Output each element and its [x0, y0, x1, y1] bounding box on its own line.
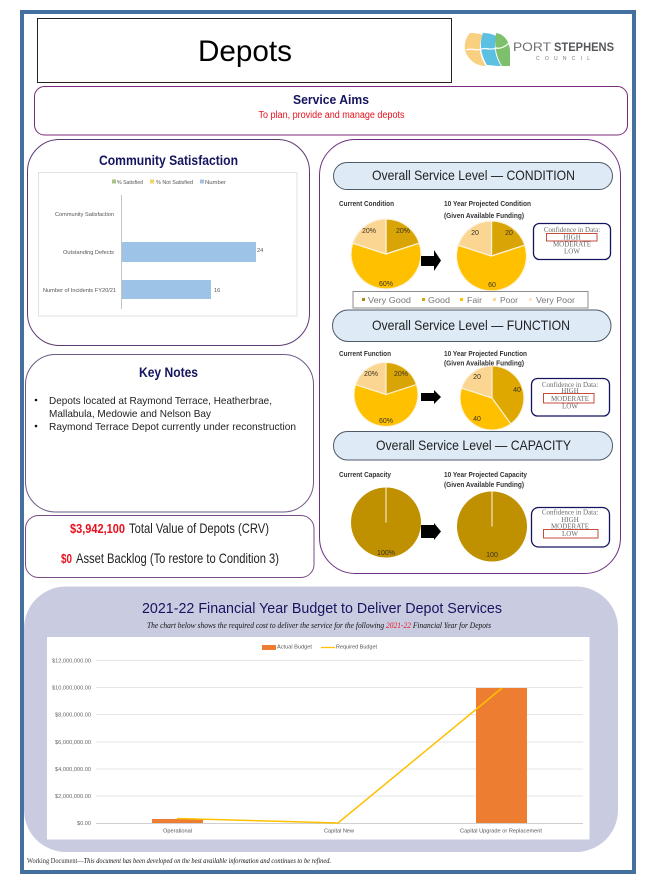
panel: service aims: To plan, provide and manage depots — [258, 110, 404, 121]
pie chart: current function: 20% — [394, 371, 408, 378]
title box: Depots — [198, 35, 292, 68]
pie chart: projected capacity: 100 — [486, 552, 498, 559]
panel: overall service levels — [320, 140, 620, 574]
heading: overall service level function: Overall Service Level — FUNCTION — [372, 317, 570, 333]
callout: confidence in data high: HIGH — [563, 234, 581, 242]
text block: key notes list: Depots located at Raymond Terrace, Heatherbrae, — [49, 395, 272, 407]
panel: service aims — [34, 86, 628, 135]
pie chart: current capacity — [351, 488, 421, 558]
bar chart: community satisfaction: 24 — [257, 248, 263, 254]
label: projected capacity: 10 Year Projected Capacity — [444, 472, 527, 479]
label: projected function: (Given Available Funding) — [444, 360, 524, 368]
callout: confidence in data high — [534, 224, 610, 260]
pie chart: projected condition: 60 — [488, 282, 496, 289]
label: projected capacity: (Given Available Funding) — [444, 482, 524, 489]
legend: condition ratings — [353, 292, 588, 308]
logo: Port Stephens Council: PORT — [513, 40, 552, 54]
chart: actual vs required budget: $8,000,000.00 — [55, 712, 91, 718]
logo: Port Stephens Council: COUNCIL — [536, 56, 590, 62]
text block: budget description: The chart below shows the required cost to deliver the service for the following 2021-22 Financial Year for Depots — [147, 621, 491, 630]
bar chart: community satisfaction: 16 — [214, 288, 220, 294]
callout: confidence in data low — [532, 508, 610, 547]
legend: condition ratings: Good — [428, 295, 450, 305]
legend: condition ratings: Poor — [500, 295, 518, 305]
logo: Port Stephens Council — [465, 33, 614, 66]
legend: condition ratings: Very Good — [368, 295, 411, 305]
chart: actual vs required budget: $10,000,000.00 — [52, 686, 91, 692]
bar chart: community satisfaction: Number of Incidents FY20/21 — [43, 288, 116, 294]
callout: confidence in data high: MODERATE — [553, 240, 591, 248]
heading: overall service level capacity: Overall Service Level — CAPACITY — [376, 437, 572, 453]
panel: asset values: $0 — [61, 551, 72, 566]
bar chart: community satisfaction: Outstanding Defects — [63, 250, 114, 256]
callout: confidence in data high: LOW — [564, 248, 580, 256]
footer note: Working Document—This document has been developed on the best available information and continues to be refined. — [27, 856, 331, 865]
callout: confidence in data high: Confidence in Data: — [544, 226, 600, 234]
pie chart: current function: 20% — [364, 371, 378, 378]
chart: actual vs required budget: Capital New — [324, 828, 355, 834]
bar chart: community satisfaction — [38, 172, 297, 316]
legend: condition ratings: Fair — [467, 295, 482, 305]
panel: community satisfaction — [28, 140, 310, 346]
label: projected condition: (Given Available Funding) — [444, 213, 524, 220]
pie chart: current condition: 20% — [396, 228, 410, 235]
callout: confidence in data low: HIGH — [561, 516, 579, 524]
chart: actual vs required budget: $2,000,000.00 — [55, 794, 91, 800]
pie chart: current function — [354, 363, 418, 426]
panel: asset values: Asset Backlog (To restore to Condition 3) — [76, 550, 279, 566]
text block: key notes list — [35, 395, 296, 433]
bar chart: community satisfaction: % Not Satisfied — [156, 180, 193, 186]
bar chart: community satisfaction: % Satisfied — [117, 180, 143, 186]
pie chart: projected condition: 20 — [471, 230, 479, 237]
pie chart: projected capacity — [457, 492, 527, 562]
arrow: condition — [421, 250, 441, 271]
pie chart: projected function: 40 — [473, 416, 481, 423]
heading: overall service level condition: Overall Service Level — CONDITION — [372, 167, 575, 183]
arrow: capacity — [421, 523, 441, 540]
label: current capacity: Current Capacity — [339, 472, 391, 479]
title box — [38, 18, 452, 82]
callout: confidence in data moderate: LOW — [562, 402, 578, 410]
pie chart: projected condition — [456, 221, 526, 291]
arrow: function — [421, 390, 441, 404]
pie chart: projected function: 20 — [473, 374, 481, 381]
heading: overall service level function — [332, 310, 611, 342]
callout: confidence in data moderate: HIGH — [561, 387, 579, 395]
pie chart: projected condition: 20 — [505, 230, 513, 237]
chart: actual vs required budget: Operational — [163, 828, 192, 834]
label: projected function: 10 Year Projected Function — [444, 351, 527, 358]
callout: confidence in data low: LOW — [562, 530, 578, 538]
chart: actual vs required budget — [47, 637, 590, 840]
text block: key notes list: Raymond Terrace Depot currently under reconstruction — [49, 421, 296, 433]
panel: asset values: Total Value of Depots (CRV) — [129, 520, 269, 536]
chart: actual vs required budget: $0.00 — [77, 821, 91, 827]
heading: key notes: Key Notes — [139, 364, 198, 380]
panel: key notes — [26, 354, 314, 512]
chart: actual vs required budget: $12,000,000.00 — [52, 658, 91, 664]
chart: actual vs required budget: Actual Budget — [277, 644, 312, 650]
callout: confidence in data moderate: Confidence in Data: — [542, 381, 598, 389]
callout: confidence in data low: MODERATE — [551, 522, 589, 530]
text block: key notes list: Mallabula, Medowie and Nelson Bay — [49, 408, 212, 420]
heading: budget: 2021-22 Financial Year Budget to Deliver Depot Services — [142, 600, 502, 617]
chart: actual vs required budget: Required Budget — [336, 644, 377, 650]
chart: actual vs required budget: Capital Upgrade or Replacement — [460, 828, 542, 834]
chart: actual vs required budget: $6,000,000.00 — [55, 740, 91, 746]
chart: actual vs required budget: $4,000,000.00 — [55, 767, 91, 773]
panel: budget — [24, 586, 618, 852]
callout: confidence in data moderate: MODERATE — [551, 395, 589, 403]
legend: condition ratings: Very Poor — [536, 295, 575, 305]
callout: confidence in data low: Confidence in Data: — [542, 508, 598, 516]
heading: overall service level capacity — [334, 432, 612, 460]
label: projected condition: 10 Year Projected Condition — [444, 201, 531, 208]
panel: asset values: $3,942,100 — [70, 521, 125, 536]
logo: Port Stephens Council: STEPHENS — [554, 40, 614, 54]
label: current condition: Current Condition — [339, 201, 394, 208]
heading: overall service level condition — [334, 162, 612, 190]
pie chart: projected function — [460, 366, 524, 430]
heading: community satisfaction: Community Satisfaction — [99, 152, 238, 168]
pie chart: current condition — [351, 219, 421, 289]
bar chart: community satisfaction: Community Satisfaction — [55, 212, 114, 218]
pie chart: current condition: 60% — [379, 281, 393, 288]
callout: confidence in data moderate — [532, 378, 610, 416]
pie chart: projected function: 40 — [513, 387, 521, 394]
label: projected capacity — [444, 472, 527, 489]
panel: asset values — [26, 516, 314, 578]
label: projected condition — [444, 201, 531, 220]
pie chart: current capacity: 100% — [377, 550, 395, 557]
pie chart: current condition: 20% — [362, 228, 376, 235]
label: projected function — [444, 351, 527, 368]
heading: service aims: Service Aims — [293, 92, 369, 107]
bar chart: community satisfaction: Number — [205, 180, 226, 186]
label: current function: Current Function — [339, 351, 391, 358]
pie chart: current function: 60% — [379, 418, 393, 425]
